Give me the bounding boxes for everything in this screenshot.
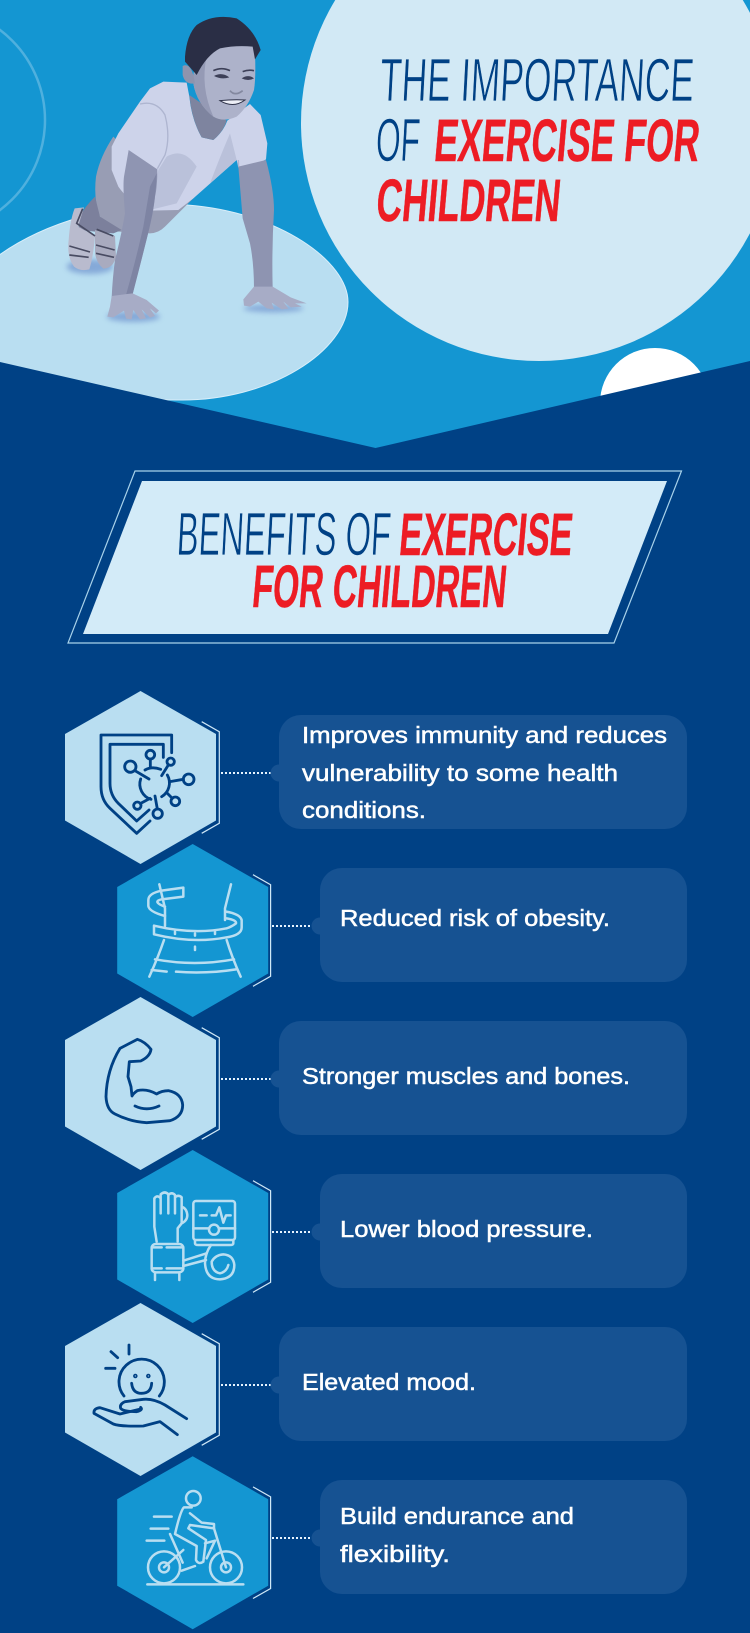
- benefit 4: blood pressure: [117, 1150, 687, 1323]
- white circle: [600, 348, 710, 458]
- panel 6 text: Build endurance and: [340, 1503, 574, 1529]
- icon: shield with virus: [101, 735, 194, 833]
- panel 1 text: conditions.: [302, 797, 426, 823]
- connector 2: [272, 925, 314, 927]
- back leg: [78, 197, 122, 233]
- panel 1: [270, 715, 687, 829]
- panel 3 text: Stronger muscles and bones.: [302, 1063, 630, 1089]
- near shoe: [68, 207, 95, 270]
- decorative ring: [0, 8, 45, 232]
- icon: flexed arm: [106, 1039, 183, 1123]
- banner: benefits heading: [68, 471, 682, 643]
- near arm shade: [126, 173, 157, 295]
- far arm: [238, 160, 274, 289]
- connector 1: [221, 772, 272, 774]
- title line 2: of: OF: [374, 106, 422, 174]
- icon: smile in hand: [94, 1345, 187, 1435]
- far shoe: [95, 230, 116, 269]
- hexagon bracket 4: [253, 1181, 271, 1292]
- panel 2 text: Reduced risk of obesity.: [340, 905, 610, 931]
- ear: [183, 65, 195, 84]
- hexagon bracket 5: [202, 1334, 219, 1445]
- benefit 2: obesity: [117, 844, 687, 1017]
- panel 6 text: flexibility.: [340, 1541, 450, 1567]
- benefit 6: endurance: [117, 1456, 687, 1629]
- eyes: [214, 74, 254, 80]
- benefit 5: mood: [65, 1303, 687, 1476]
- header background: [0, 0, 750, 450]
- shoe straps: [69, 209, 115, 257]
- large title circle: [301, 0, 750, 361]
- hexagon bracket 2: [253, 875, 271, 986]
- cheek shade: [193, 57, 213, 117]
- near arm: [112, 150, 157, 297]
- hexagon 4: [117, 1150, 268, 1323]
- banner text blue: BENEFITS OF: [175, 500, 393, 568]
- hexagon 6: [117, 1456, 268, 1629]
- hexagon 5: [65, 1303, 216, 1476]
- banner text red line 1: EXERCISE: [397, 501, 576, 568]
- dark chevron background: [0, 361, 750, 1633]
- shirt shade: [150, 133, 238, 210]
- nose: [230, 91, 243, 94]
- photo: boy doing push-up: [67, 17, 307, 322]
- banner outline: [68, 471, 682, 643]
- icon: waist with tape: [148, 884, 242, 977]
- title: [374, 46, 703, 234]
- connector 5: [221, 1384, 272, 1386]
- hexagon 3: [65, 997, 216, 1170]
- hexagon 2: [117, 844, 268, 1017]
- connector 3: [221, 1078, 272, 1080]
- connector 6: [272, 1537, 314, 1539]
- benefit 3: muscles: [65, 997, 687, 1170]
- panel 6 text: [340, 1503, 574, 1567]
- far hand: [243, 287, 307, 309]
- banner text red line 2: FOR CHILDREN: [250, 553, 510, 620]
- brows: [213, 69, 254, 72]
- shorts: [95, 137, 195, 233]
- panel 6: [312, 1480, 687, 1594]
- panel 5 text: Elevated mood.: [302, 1369, 476, 1395]
- hexagon bracket 3: [202, 1028, 219, 1139]
- panel 1 text: [302, 722, 667, 823]
- icon: cyclist: [147, 1491, 243, 1584]
- near hand: [107, 293, 159, 319]
- hexagon 1: [65, 691, 216, 864]
- floor ellipse: [0, 204, 348, 400]
- panel 2: [312, 868, 687, 982]
- panel 4: [312, 1174, 687, 1288]
- panel 3: [270, 1021, 687, 1135]
- panel 4 text: Lower blood pressure.: [340, 1216, 593, 1242]
- panel 1 text: Improves immunity and reduces: [302, 722, 667, 748]
- connector 4: [272, 1231, 314, 1233]
- contact shadows: [67, 259, 303, 322]
- hexagon bracket 1: [202, 722, 219, 833]
- benefit 1: immunity: [65, 691, 687, 864]
- sleeve seam: [140, 103, 239, 169]
- t-shirt: [112, 82, 267, 211]
- face: [193, 37, 255, 120]
- hexagon bracket 6: [253, 1487, 271, 1598]
- icon: blood pressure monitor: [152, 1192, 235, 1280]
- title line 3: CHILDREN: [374, 167, 564, 234]
- banner panel: [83, 481, 667, 634]
- panel 1 text: vulnerability to some health: [302, 760, 618, 786]
- panel 5: [270, 1327, 687, 1441]
- mouth: [220, 100, 245, 105]
- neck: [189, 95, 227, 140]
- hair: [185, 17, 261, 75]
